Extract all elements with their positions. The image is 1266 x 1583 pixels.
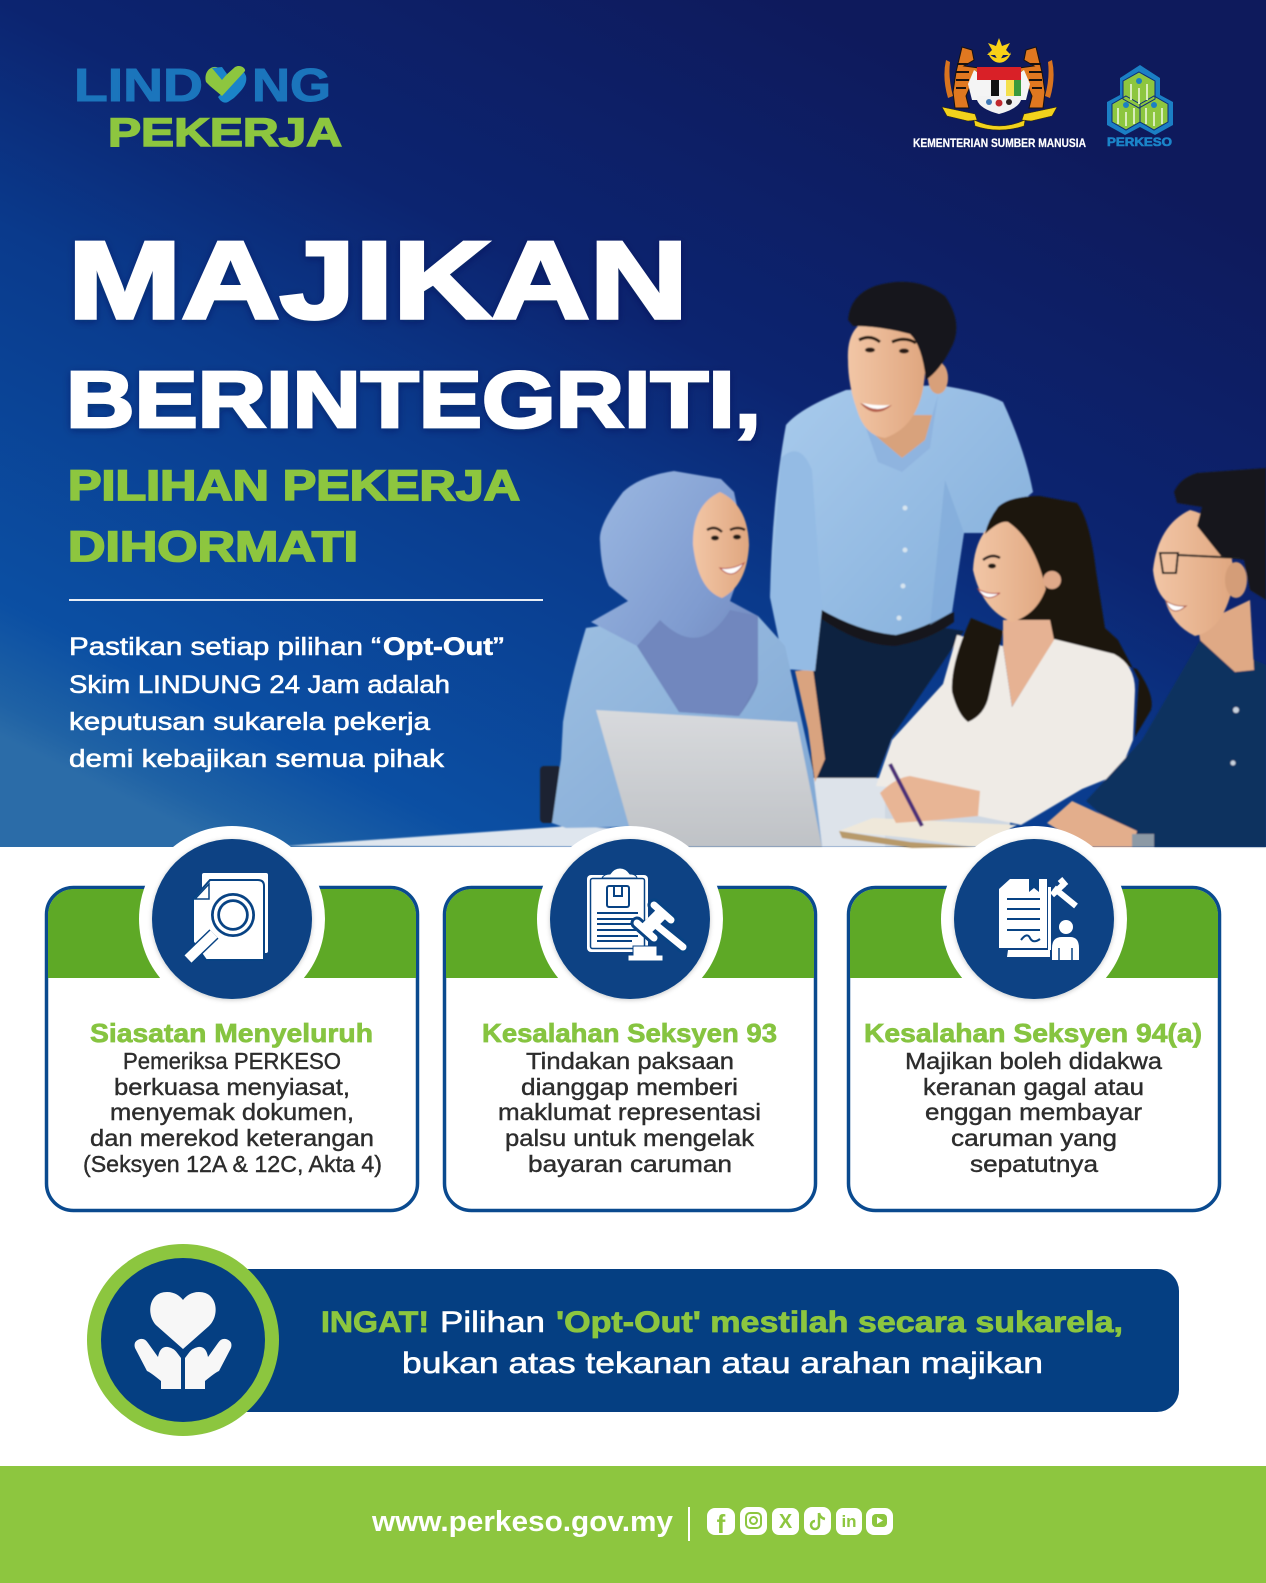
icon: social media row: [707, 1507, 893, 1539]
text block: intro paragraph: [69, 633, 504, 773]
text block: Majikan boleh didakwa: [905, 1048, 1162, 1074]
callout text: 'Opt-Out' mestilah secara sukarela,: [556, 1306, 1123, 1339]
table: [285, 778, 1010, 847]
heading: Kesalahan Seksyen 93: [482, 1018, 777, 1048]
icon: social media row: in: [841, 1512, 857, 1531]
panel: Kesalahan Seksyen 93: [444, 826, 816, 1210]
logo: Kementerian Sumber Manusia crest: KEMENTERIAN SUMBER MANUSIA: [913, 138, 1086, 150]
icon: heart check: [205, 66, 246, 103]
hero background: [0, 0, 1266, 847]
subtitle: Pilihan Pekerja Dihormati: [68, 462, 520, 571]
text block: intro paragraph: Pastikan setiap pilihan “: [69, 633, 381, 661]
icon: social media row: f: [717, 1509, 726, 1539]
website: www.perkeso.gov.my: [371, 1506, 673, 1538]
title: Majikan Berintegriti: BERINTEGRITI,: [66, 355, 761, 444]
icon: clipboard and gavel: [537, 826, 723, 1012]
panel: Kesalahan Seksyen 94(a): [848, 826, 1220, 1210]
title: Majikan Berintegriti: [66, 219, 761, 444]
logo: Lindung Pekerja: LIND: [74, 59, 203, 111]
logo: Kementerian Sumber Manusia crest: [913, 38, 1086, 150]
text block: intro paragraph: keputusan sukarela pekerja: [69, 708, 430, 736]
crest shield: [977, 67, 1021, 114]
callout text: [321, 1306, 1123, 1380]
subtitle: Pilihan Pekerja Dihormati: PILIHAN PEKERJA: [68, 462, 520, 510]
person: man with glasses: [1047, 468, 1266, 847]
text block: [83, 1048, 382, 1177]
text block: Tindakan paksaan: [526, 1048, 734, 1074]
icon: social media row: X: [779, 1511, 793, 1533]
title: Majikan Berintegriti: MAJIKAN: [68, 219, 688, 342]
panel: Siasatan Menyeluruh: [46, 826, 418, 1210]
chair: [540, 766, 561, 823]
text block: [905, 1048, 1162, 1177]
text block: (Seksyen 12A & 12C, Akta 4): [83, 1151, 382, 1177]
text block: Pemeriksa PERKESO: [123, 1048, 341, 1074]
heading: Kesalahan Seksyen 94(a): [864, 1018, 1202, 1048]
icon: magnifying glass on document: [139, 826, 325, 1012]
logo: PERKESO: [1107, 65, 1173, 149]
callout text: INGAT!: [321, 1306, 429, 1339]
photo: four colleagues around a table: [285, 282, 1266, 848]
callout text: Pilihan: [440, 1306, 545, 1339]
footer bar: [0, 1466, 1266, 1583]
text block: intro paragraph: demi kebajikan semua pihak: [69, 745, 445, 773]
text block: dianggap memberi: [521, 1074, 738, 1100]
person: woman in hijab: [552, 471, 822, 846]
crest ribbon: [942, 107, 1057, 130]
text block: bayaran caruman: [528, 1151, 732, 1177]
text block: intro paragraph: Skim LINDUNG 24 Jam adalah: [69, 671, 450, 699]
subtitle: Pilihan Pekerja Dihormati: DIHORMATI: [68, 523, 358, 571]
text block: dan merekod keterangan: [90, 1125, 374, 1151]
logo: Lindung Pekerja: [74, 59, 342, 155]
text block: enggan membayar: [925, 1099, 1142, 1125]
heading: Siasatan Menyeluruh: [90, 1018, 373, 1048]
text block: maklumat representasi: [498, 1099, 761, 1125]
text block: berkuasa menyiasat,: [114, 1074, 350, 1100]
person: standing man: [770, 282, 1033, 782]
logo: Lindung Pekerja: NG: [252, 59, 331, 111]
text block: keranan gagal atau: [923, 1074, 1144, 1100]
callout: Ingat banner: [87, 1244, 1179, 1436]
text block: menyemak dokumen,: [110, 1099, 354, 1125]
crest star and moon: [987, 38, 1011, 63]
callout text: bukan atas tekanan atau arahan majikan: [402, 1347, 1043, 1380]
crest tigers: [944, 47, 1054, 108]
text block: intro paragraph: Opt-Out: [383, 633, 494, 661]
logo: PERKESO: PERKESO: [1107, 137, 1172, 149]
text block: [498, 1048, 761, 1177]
laptop: [596, 710, 822, 847]
text block: palsu untuk mengelak: [505, 1125, 755, 1151]
text block: caruman yang: [951, 1125, 1117, 1151]
icon: hands holding heart: [87, 1244, 279, 1436]
text block: sepatutnya: [970, 1151, 1098, 1177]
person: woman with dark hair: [839, 496, 1152, 848]
icon: document, gavel and person: [941, 826, 1127, 1012]
logo: Lindung Pekerja: PEKERJA: [108, 111, 342, 155]
text block: intro paragraph: ”: [493, 633, 504, 661]
